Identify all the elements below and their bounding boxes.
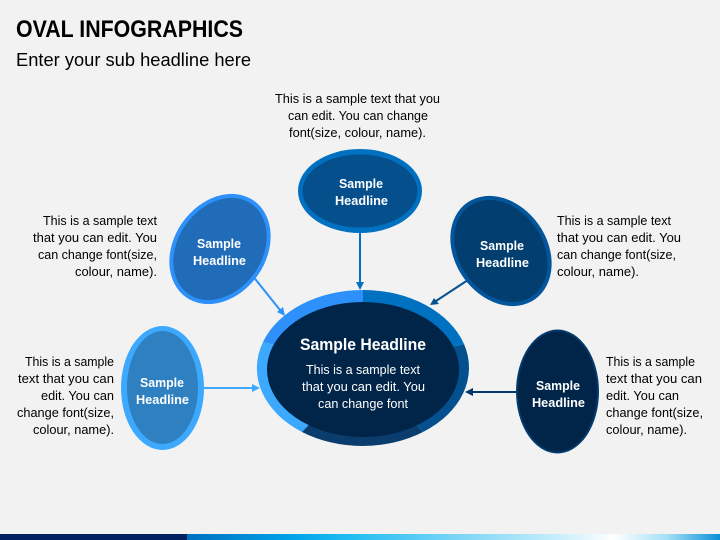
oval: top [298, 149, 422, 233]
oval: top: Sample [339, 176, 383, 191]
text block: upper left: This is a sample text [43, 213, 157, 228]
subtitle: Enter your sub headline here [16, 50, 251, 70]
text block: lower right: colour, name). [606, 422, 687, 437]
inner ellipse [267, 302, 459, 437]
oval: upper left [148, 174, 292, 324]
center text: This is a sample text [306, 362, 420, 377]
bottom bar [0, 534, 720, 540]
text block: top: This is a sample text that you [275, 91, 440, 106]
text block: lower left: edit. You can [41, 388, 114, 403]
text block: top [275, 91, 440, 140]
text block: upper left: can change font(size, [38, 247, 157, 262]
oval: upper right: Headline [476, 255, 529, 270]
text block: lower left: colour, name). [33, 422, 114, 437]
oval: upper left: Sample [197, 236, 241, 251]
central oval [257, 290, 469, 446]
center text [302, 362, 425, 411]
arrow: upper left oval to center [252, 275, 285, 316]
center text: can change font [318, 396, 408, 411]
text block: lower left: This is a sample [25, 354, 114, 369]
oval: lower right: Sample [536, 378, 580, 393]
text block: top: can edit. You can change [288, 108, 428, 123]
text block: lower left [17, 354, 114, 437]
text block: upper left: colour, name). [75, 264, 157, 279]
arrow: lower left oval to center [204, 384, 260, 392]
oval: lower left [121, 326, 204, 450]
oval: lower left: Sample [140, 375, 184, 390]
oval: lower right [516, 330, 599, 454]
text block: upper left [33, 213, 157, 279]
text block: lower right: text that you can [606, 371, 702, 386]
oval: upper right: Sample [480, 238, 524, 253]
text block: lower right [606, 354, 703, 437]
text block: upper right: colour, name). [557, 264, 639, 279]
oval: top: Headline [335, 193, 388, 208]
ring segment: bottom [302, 368, 423, 446]
text block: upper right: that you can edit. You [557, 230, 681, 245]
text block: upper right: This is a sample text [557, 213, 671, 228]
ring segment: left [257, 342, 363, 432]
text block: lower right: change font(size, [606, 405, 703, 420]
text block: upper right [557, 213, 681, 279]
oval: lower right: Headline [532, 395, 585, 410]
text block: upper right: can change font(size, [557, 247, 676, 262]
arrow: lower right oval to center [465, 388, 517, 396]
oval: upper left: Headline [193, 253, 246, 268]
ring segment: right [363, 344, 469, 432]
ring segment: top right [363, 290, 464, 368]
oval: lower left: Headline [136, 392, 189, 407]
arrow: top oval to center [356, 232, 364, 290]
text block: top: font(size, colour, name). [289, 125, 426, 140]
text block: upper left: that you can edit. You [33, 230, 157, 245]
oval: upper right [429, 176, 573, 326]
text block: lower right: edit. You can [606, 388, 679, 403]
text block: lower left: change font(size, [17, 405, 114, 420]
center text: that you can edit. You [302, 379, 425, 394]
title: OVAL INFOGRAPHICS [16, 16, 243, 43]
center heading: Sample Headline [300, 335, 426, 354]
text block: lower left: text that you can [18, 371, 114, 386]
arrow: upper right oval to center [430, 278, 471, 305]
text block: lower right: This is a sample [606, 354, 695, 369]
ring segment: top left [263, 290, 363, 368]
